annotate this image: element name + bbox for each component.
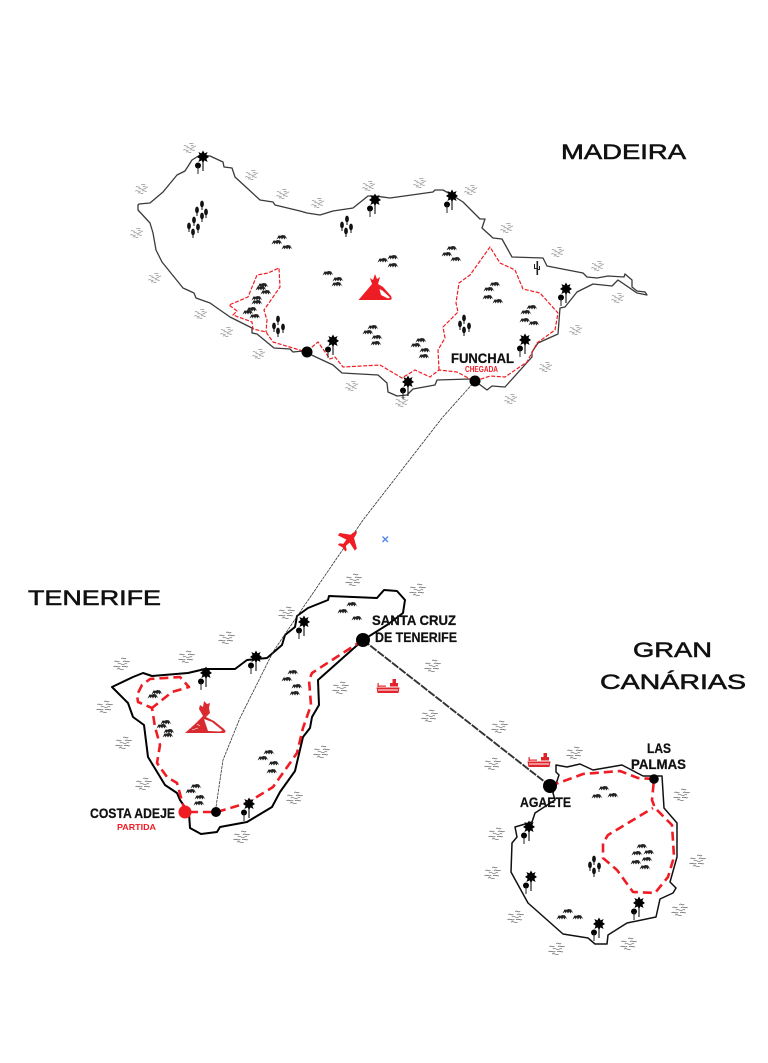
label: Costa Adeje: [90, 805, 175, 832]
red route: Tenerife: [137, 640, 363, 812]
label: Las Palmas: LAS: [647, 740, 671, 756]
island outline: Madeira: [138, 155, 647, 396]
icon: ferry Gran Canária: [528, 753, 550, 767]
flight path: Tenerife to Funchal: [216, 381, 475, 807]
icon: blue cross: [382, 536, 388, 542]
icon: airplane: [333, 523, 366, 556]
title: Gran Canárias: [600, 639, 746, 694]
title: Madeira: MADEIRA: [561, 141, 686, 164]
label: Santa Cruz de Tenerife: DE TENERIFE: [375, 629, 457, 645]
icon: volcano Tenerife: [185, 701, 226, 733]
island outline: Tenerife: [112, 590, 405, 834]
label: Funchal: FUNCHAL: [451, 350, 514, 366]
icon: cactus: [534, 261, 540, 275]
label: Las Palmas: PALMAS: [631, 756, 686, 772]
title: Gran Canárias: GRAN: [633, 639, 712, 662]
icon: volcano Madeira: [358, 274, 392, 300]
label: Funchal: CHEGADA: [465, 364, 498, 374]
label: Santa Cruz de Tenerife: SANTA CRUZ: [372, 612, 456, 628]
mountains: [148, 235, 654, 920]
palm trees: [195, 150, 645, 941]
label: Las Palmas: [631, 740, 686, 772]
label: Costa Adeje: COSTA ADEJE: [90, 805, 175, 821]
sea waves: [96, 143, 706, 954]
title: Tenerife: TENERIFE: [28, 587, 161, 610]
title: Gran Canárias: CANÁRIAS: [600, 671, 746, 694]
stop: Las Palmas: [649, 774, 659, 784]
stop: south Tenerife: [211, 807, 221, 817]
label: Funchal: [451, 350, 514, 374]
red route: Gran Canária: [550, 771, 674, 893]
label: Costa Adeje: PARTIDA: [117, 822, 156, 832]
ferry route: Santa Cruz to Agaete: [363, 640, 550, 786]
stop: west Madeira: [302, 346, 312, 358]
stop: Santa Cruz: [356, 633, 370, 647]
forest trees: [187, 201, 601, 877]
stop: Costa Adeje: [178, 806, 192, 818]
island outline: Gran Canária: [511, 764, 677, 944]
red routes: Madeira: [229, 247, 558, 381]
label: Santa Cruz de Tenerife: [372, 612, 457, 645]
stop: Funchal: [470, 376, 480, 386]
label: Agaete: AGAETE: [520, 794, 571, 810]
icon: ferry Tenerife: [376, 679, 400, 693]
stop: Agaete: [543, 779, 557, 793]
